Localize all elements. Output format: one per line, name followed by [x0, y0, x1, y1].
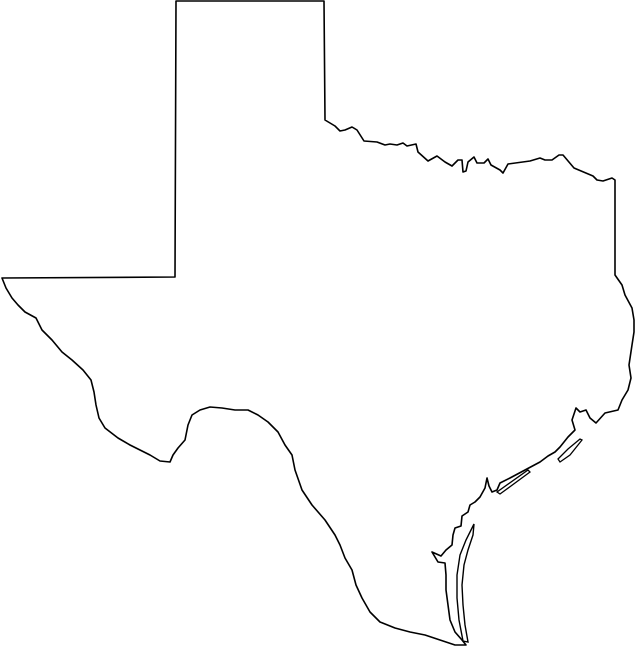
barrier island: Galveston	[558, 439, 582, 462]
barrier island: Padre	[457, 524, 474, 642]
barrier island: Matagorda	[497, 470, 530, 494]
